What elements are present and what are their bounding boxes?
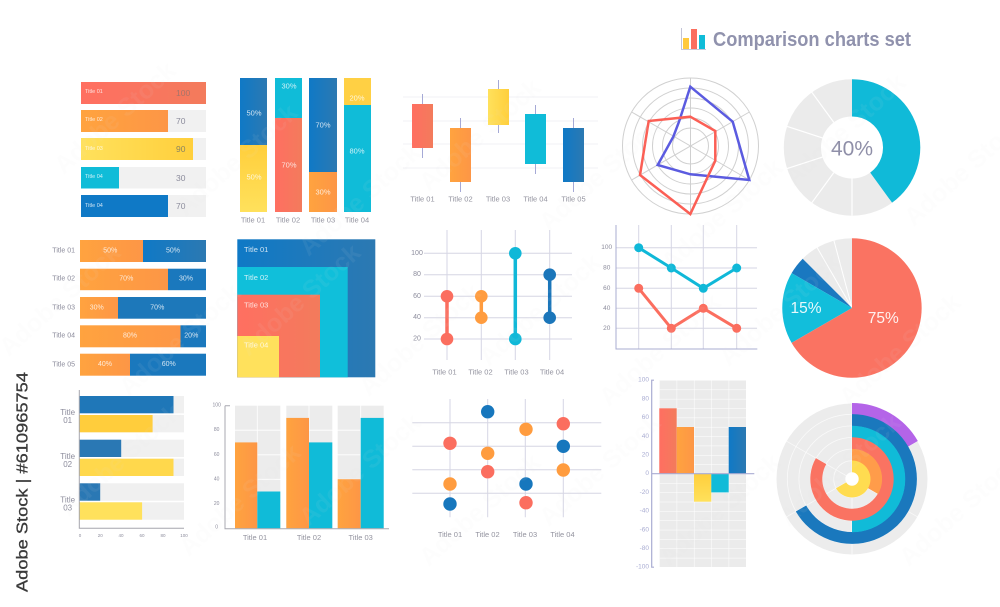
series: red range [441,290,453,345]
panel: candlestick chart: Title 03 [486,194,510,204]
panel: horizontal grouped bars: Title [60,452,76,461]
panel: horizontal progress bars: 90 [176,144,186,154]
panel: positive and negative bar chart: -60 [640,526,649,533]
panel: horizontal grouped bars: 20 [98,533,103,538]
series: cyan range [509,247,522,345]
panel: positive and negative bar chart: 100 [638,377,649,384]
panel: line chart: 80 [603,264,611,272]
panel: stacked column chart [240,78,371,224]
series: red dots [443,417,570,509]
panel: positive and negative bar chart: 80 [642,395,649,402]
panel: candlestick chart: Title 02 [448,194,473,204]
panel: stacked horizontal percent bars: Title 05 [52,362,75,368]
heading: Comparison charts set [713,29,911,51]
watermark layer: Adobe Stock [234,238,366,362]
panel: dumbbell range chart: 40 [413,314,421,321]
panel: candlestick chart: Title 01 [410,194,435,204]
watermark layer: Adobe Stock [534,408,666,532]
panel: horizontal progress bars: Title 03 [85,146,103,152]
watermark layer: Adobe Stock [294,138,426,262]
watermark layer: Adobe Stock [594,288,726,412]
panel: stacked horizontal percent bars: 70% [119,276,133,282]
panel: grouped column chart [213,403,389,542]
panel: grouped column chart: Title 01 [243,533,267,542]
panel: dumbbell range chart: Title 01 [432,368,457,376]
panel: grouped column chart: 40 [214,476,220,482]
panel: dumbbell range chart [411,230,572,376]
panel: stacked column chart: 50% [246,172,262,182]
panel: dumbbell range chart: 20 [413,336,421,342]
panel: line chart [601,225,757,349]
panel: grouped column chart: 100 [213,403,221,409]
panel: positive and negative bar chart [636,377,754,571]
watermark layer: Adobe Stock [114,278,246,402]
panel: stacked column chart: 30% [281,82,297,90]
watermark layer: Adobe Stock [414,73,546,197]
panel: horizontal progress bars: 30 [176,173,186,183]
panel: grouped column chart: 60 [214,452,220,458]
panel: stacked column chart: Title 02 [276,216,300,224]
panel: stacked column chart: 20% [349,94,365,102]
panel: dot plot [412,399,601,539]
panel: horizontal grouped bars: 02 [63,460,73,469]
panel: stacked column chart: 50% [246,108,262,118]
ring: dark blue [801,420,911,538]
watermark layer: Adobe Stock [354,278,486,402]
watermark layer: Adobe Stock [54,398,186,522]
ring: purple [852,409,913,444]
panel: nested area squares: Title 02 [244,273,268,282]
panel: dot plot: Title 02 [475,530,500,539]
panel: stacked horizontal percent bars: 50% [103,248,117,254]
panel: positive and negative bar chart: 0 [645,470,649,477]
ring: yellow [841,466,864,492]
panel: dumbbell range chart: 100 [411,250,423,257]
panel: positive and negative bar chart: -100 [636,564,649,571]
panel: grouped column chart: 20 [214,501,220,507]
panel: grouped column chart: Title 03 [349,533,373,542]
panel: candlestick chart: Title 05 [561,194,586,204]
panel: radar chart [622,78,758,214]
panel: stacked horizontal percent bars: Title 02 [52,276,75,282]
panel: stacked horizontal percent bars: Title 01 [52,248,75,254]
panel: nested area squares: Title 03 [244,300,268,310]
panel: donut chart 40%: 40% [831,138,873,160]
panel: dumbbell range chart: 80 [413,271,421,278]
panel: stacked column chart: 70% [281,160,297,170]
panel: radial bar chart [776,404,928,554]
panel: horizontal progress bars: Title 01 [85,89,103,95]
ring: orange [852,455,876,491]
stock credit text: Adobe Stock | #610965754 [14,372,32,592]
panel: stacked horizontal percent bars: 30% [179,276,193,282]
series: orange dots [443,423,570,491]
panel: candlestick chart: Title 04 [523,194,548,204]
panel: horizontal grouped bars [60,390,188,538]
panel: line chart: 60 [603,285,611,292]
panel: stacked horizontal percent bars: 20% [184,332,198,340]
series: blue polygon [658,87,749,180]
series: red line [634,284,741,333]
panel: stacked horizontal percent bars: 40% [98,361,112,368]
panel: dumbbell range chart: Title 03 [504,368,529,376]
panel: pie chart 75% and 15% [782,238,922,378]
watermark layer: Adobe Stock [414,448,546,572]
watermark layer: Adobe Stock [294,408,426,532]
panel: line chart: 40 [603,305,611,312]
title block [682,28,911,51]
ring: red [816,443,888,515]
panel: dot plot: Title 04 [550,530,575,539]
panel: stacked column chart: Title 04 [345,216,369,224]
watermark layer: Adobe Stock [174,438,306,562]
panel: horizontal grouped bars: Title [60,408,76,417]
series: cyan line [634,243,741,293]
watermark layer: Adobe Stock [714,248,846,372]
panel: pie chart 75% and 15%: 15% [790,300,822,317]
panel: grouped column chart: 80 [214,427,220,433]
panel: positive and negative bar chart: -40 [640,508,649,515]
panel: horizontal grouped bars: 01 [63,416,73,425]
panel: horizontal progress bars: Title 04 [85,203,103,209]
panel: stacked horizontal percent bars: 70% [150,304,164,312]
panel: positive and negative bar chart: 60 [642,414,649,421]
panel: horizontal grouped bars: 0 [79,533,82,538]
watermark layer: Adobe Stock [171,98,303,222]
panel: horizontal grouped bars: 100 [180,533,188,538]
watermark layer: Adobe Stock [534,113,666,237]
panel: grouped column chart: Title 02 [297,533,321,542]
panel: positive and negative bar chart: -80 [640,545,649,552]
panel: horizontal progress bars: Title 02 [85,117,103,123]
panel: pie chart 75% and 15%: 75% [868,310,899,327]
watermark layer: Adobe Stock [656,153,788,277]
panel: horizontal grouped bars: 60 [139,533,145,538]
panel: stacked column chart: Title 03 [311,216,335,224]
watermark layer: Adobe Stock [474,248,606,372]
panel: dumbbell range chart: 60 [413,293,421,300]
panel: line chart: 20 [603,325,611,332]
panel: stacked horizontal percent bars: 30% [90,304,104,312]
panel: line chart: 100 [601,244,613,251]
panel: donut chart 40% [787,92,902,216]
series: blue dots [443,405,570,511]
panel: positive and negative bar chart: -20 [640,489,649,496]
panel: stacked horizontal percent bars: Title 03 [52,304,75,312]
watermark layer: Adobe Stock [654,448,786,572]
panel: stacked horizontal percent bars: 60% [162,361,176,368]
panel: horizontal grouped bars: Title [60,496,76,504]
panel: grouped column chart: 0 [215,524,218,530]
panel: horizontal progress bars: 100 [176,88,190,98]
panel: nested area squares [237,239,375,377]
panel: stacked horizontal percent bars: 50% [166,248,180,254]
panel: stacked column chart: 70% [315,120,331,130]
panel: stacked horizontal percent bars: 80% [123,332,137,340]
panel: candlestick chart [403,80,598,204]
panel: horizontal progress bars [81,82,206,217]
panel: horizontal grouped bars: 40 [118,533,124,538]
panel: dot plot: Title 03 [513,530,537,539]
panel: nested area squares: Title 04 [244,340,268,350]
panel: dumbbell range chart: Title 02 [468,368,493,376]
series: blue range [543,268,556,324]
panel: dumbbell range chart: Title 04 [540,368,564,376]
panel: positive and negative bar chart: 40 [642,433,649,440]
panel: horizontal progress bars: 70 [176,201,186,211]
panel: stacked column chart: Title 01 [241,216,265,224]
panel: stacked horizontal percent bars [52,240,206,376]
watermark layer: Adobe Stock [774,408,906,532]
panel: positive and negative bar chart: 20 [642,452,649,458]
panel: stacked column chart: 30% [315,188,331,196]
panel: horizontal grouped bars: 80 [160,533,166,538]
watermark layer: Adobe Stock [779,68,911,192]
series: red polygon [640,117,715,214]
watermark layer: Adobe Stock [834,288,966,412]
icon: bar chart logo [682,28,706,50]
panel: stacked column chart: 80% [349,146,365,156]
series: orange range [475,290,488,324]
panel: dot plot: Title 01 [438,530,462,539]
panel: nested area squares: Title 01 [244,245,268,254]
panel: horizontal grouped bars: 03 [63,504,73,512]
panel: stacked horizontal percent bars: Title 04 [52,332,75,340]
watermark layer: Adobe Stock [49,56,181,180]
panel: horizontal progress bars: 70 [176,116,186,126]
panel: horizontal progress bars: Title 04 [85,174,103,180]
ring: cyan [852,432,899,526]
